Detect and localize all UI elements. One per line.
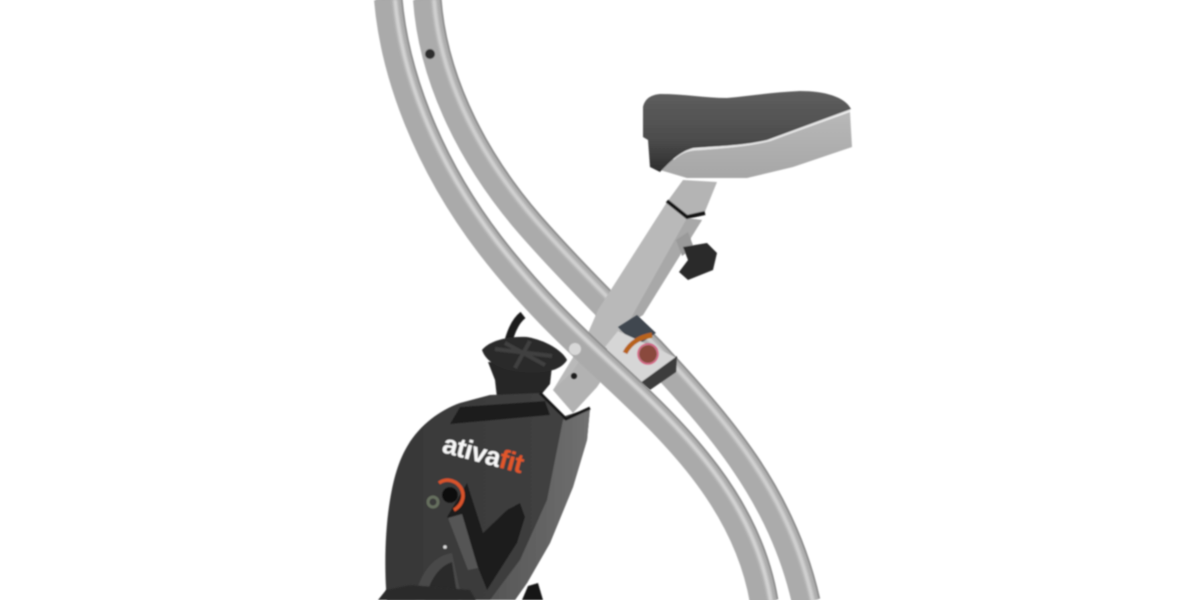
front pedal and strap bbox=[482, 315, 567, 398]
front frame tube bbox=[388, 0, 771, 600]
brand logo: ativafit bbox=[439, 429, 527, 479]
saddle bbox=[643, 91, 852, 178]
seat post bbox=[553, 180, 717, 413]
rear pedal and wheel at bottom edge bbox=[378, 583, 543, 600]
seat clamp knob bbox=[676, 232, 717, 280]
crank and pedal arm bbox=[415, 480, 525, 600]
flywheel housing bbox=[385, 393, 590, 600]
rear frame tube bbox=[425, 0, 813, 600]
warning sticker block bbox=[605, 315, 677, 390]
